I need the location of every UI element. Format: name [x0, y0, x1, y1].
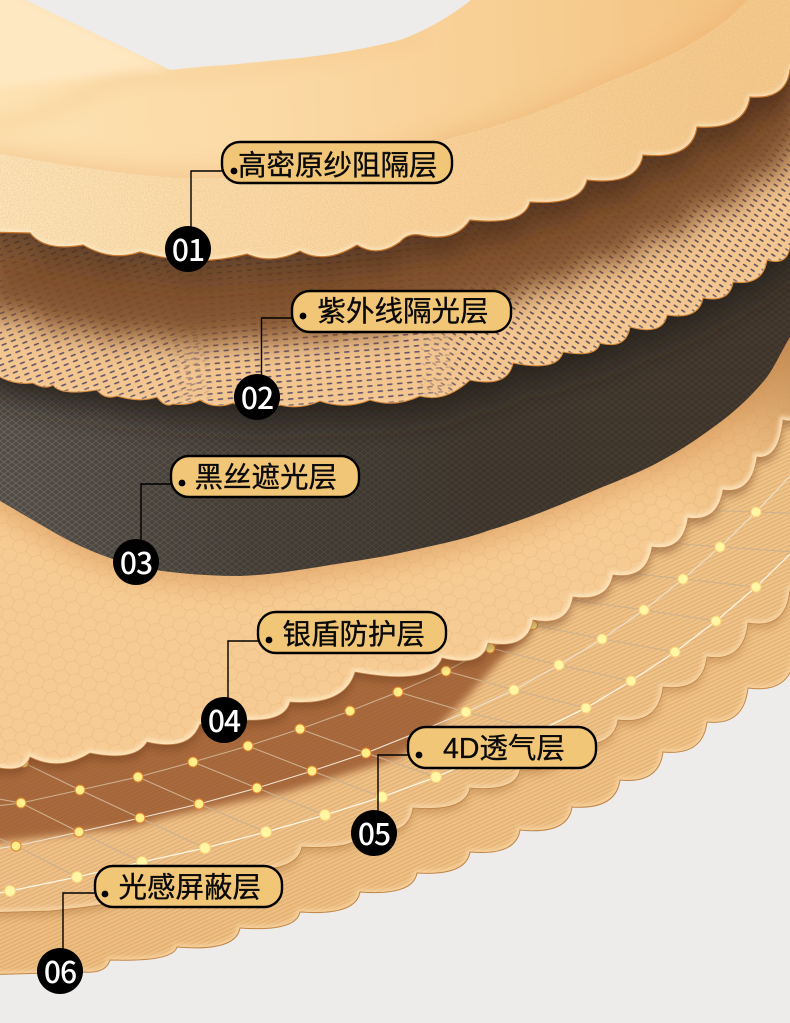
bright nodes: [4, 507, 761, 896]
callout 02: [234, 291, 511, 420]
callout 03: 03: [120, 539, 152, 583]
callout 03: [113, 456, 359, 585]
layer 1: high-density yarn barrier fabric: [0, 0, 790, 261]
callout 06: [37, 866, 282, 994]
callout 02: 紫外线隔光层: [318, 296, 489, 328]
outer wire: [0, 535, 790, 897]
layer 3: black silk shading fabric: [0, 250, 790, 576]
callout 05: 4D透气层: [443, 733, 565, 765]
layer 6: light-sensing shield fabric: [0, 594, 790, 975]
callout 04: 银盾防护层: [282, 619, 425, 651]
callout 05: [351, 727, 596, 856]
mesh wires: [0, 455, 790, 877]
callout 06: 06: [44, 948, 76, 992]
layer 1 inner fold: [0, 0, 747, 178]
callout 01: 高密原纱阻隔层: [238, 150, 438, 182]
layer 4: silver shield fabric: [0, 337, 790, 776]
callout 04: 04: [208, 697, 241, 741]
callout 01: 01: [172, 226, 204, 270]
mesh nodes: [11, 620, 538, 851]
callout 01: [165, 142, 452, 272]
cast shadow from top layer: [0, 64, 790, 345]
dash perforations: [0, 174, 212, 404]
callout 02: 02: [241, 374, 273, 418]
shaded brown interior: [0, 630, 535, 847]
layer 2: UV blocking fabric: [0, 74, 790, 408]
layer 5: 4D breathable fabric with mesh: [0, 420, 790, 920]
callout 04: [201, 612, 446, 743]
callout 03: 黑丝遮光层: [194, 462, 337, 494]
callout 06: 光感屏蔽层: [118, 872, 261, 904]
callout 05: 05: [358, 810, 390, 854]
